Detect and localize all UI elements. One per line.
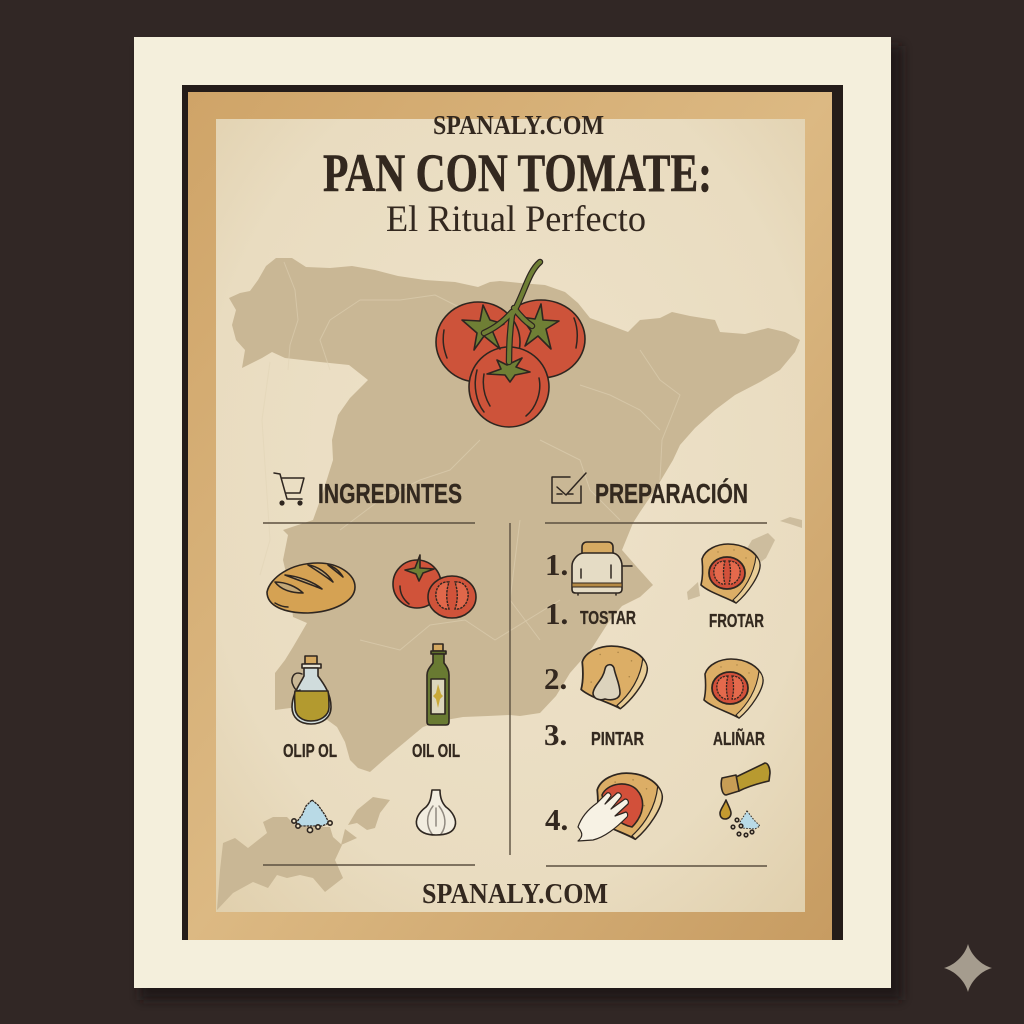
ingredients heading: [274, 473, 462, 509]
paper panel: [216, 119, 805, 912]
preparation heading: [552, 473, 748, 509]
section rules: [263, 523, 767, 866]
label: pintar: PINTAR: [591, 729, 644, 749]
main title: PAN CON TOMATE:: [323, 143, 712, 203]
step number 2: 2.: [544, 661, 567, 696]
subtitle: El Ritual Perfecto: [386, 199, 646, 240]
icon: tomato and half tomato: [393, 555, 476, 618]
icon: oil drop: [720, 800, 731, 819]
label: frotar: FROTAR: [709, 611, 764, 631]
icon: oil bottle pouring: [721, 763, 770, 795]
header site name: SPANALY.COM: [433, 110, 604, 140]
cream outer frame: [134, 37, 891, 988]
heading text: preparation: PREPARACIÓN: [595, 478, 748, 509]
panel: preparation steps: [544, 542, 770, 841]
icon: olive oil jug: [292, 656, 331, 724]
label: tostar: TOSTAR: [580, 608, 636, 628]
icon: shopping cart: [274, 473, 304, 506]
icon: toast with tomato slice: [704, 659, 763, 718]
icon: sea salt: [731, 811, 760, 837]
icon: tomato vine: [436, 262, 585, 427]
footer site name: SPANALY.COM: [422, 878, 608, 910]
tan poster border: [188, 92, 832, 940]
icon: garlic: [416, 790, 456, 835]
poster shadow: [140, 46, 902, 1000]
icon: salt pile: [292, 800, 332, 833]
heading text: ingredients: INGREDINTES: [318, 478, 462, 509]
icon: toast with rubbed tomato: [701, 544, 760, 603]
dark inner mat: [182, 85, 843, 940]
step number 4: 4.: [545, 802, 568, 837]
label: alinar: ALIÑAR: [713, 728, 765, 749]
label: oil oil: OIL OIL: [412, 741, 460, 761]
icon: toast with garlic: [581, 646, 647, 709]
icon: green oil bottle: [427, 644, 449, 725]
icon: checklist: [552, 473, 586, 503]
icon: bread loaf: [267, 563, 355, 613]
step number 1 repeat: 1.: [545, 596, 568, 631]
icon: sparkle watermark: [944, 944, 992, 992]
icon: hand rubbing tomato on toast: [578, 773, 662, 841]
step number 1: 1.: [545, 547, 568, 582]
icon: toaster: [572, 542, 632, 595]
step number 3: 3.: [544, 717, 567, 752]
background map of Spain: [217, 258, 802, 910]
panel: ingredients: [267, 555, 476, 835]
label: olip ol: OLIP OL: [283, 741, 337, 761]
